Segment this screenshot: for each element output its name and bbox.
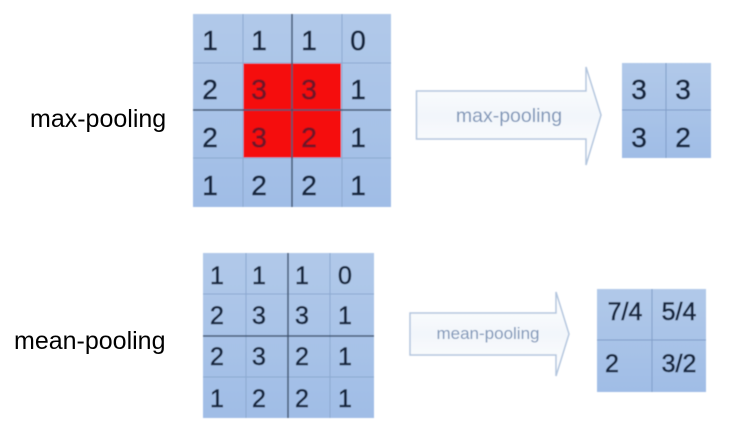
grid: max-pooling input: 2 — [202, 74, 218, 105]
grid: max-pooling input: 1 — [301, 25, 317, 56]
grid: max-pooling input: 1 — [251, 25, 267, 56]
grid: max-pooling input: 2 — [301, 122, 317, 153]
grid: mean-pooling input: 3 — [295, 302, 309, 330]
grid: max-pooling input — [193, 14, 391, 207]
grid: max-pooling input: 3 — [301, 74, 317, 105]
grid: mean-pooling input: 1 — [338, 343, 352, 371]
grid: max-pooling output: 3 — [631, 122, 647, 153]
grid: max-pooling input: 1 — [202, 170, 218, 201]
grid: mean-pooling input: 2 — [295, 343, 309, 371]
arrow: mean-pooling — [410, 292, 569, 376]
grid: max-pooling input: 0 — [350, 25, 366, 56]
label: max-pooling: max-pooling — [30, 105, 166, 133]
grid: mean-pooling input: 1 — [210, 385, 224, 413]
grid: mean-pooling input: 1 — [210, 262, 224, 290]
grid: mean-pooling input: 1 — [252, 262, 266, 290]
grid: max-pooling input: 2 — [251, 170, 267, 201]
grid: mean-pooling input — [203, 253, 374, 418]
grid: mean-pooling input: 1 — [338, 385, 352, 413]
grid: mean-pooling output: 2 — [605, 350, 619, 378]
highlighted red region — [243, 63, 341, 158]
grid: max-pooling input: 3 — [251, 74, 267, 105]
grid: max-pooling output — [622, 63, 711, 158]
grid: max-pooling input: 2 — [301, 170, 317, 201]
grid: max-pooling output: 2 — [675, 122, 691, 153]
arrow: max-pooling — [416, 67, 601, 165]
label: mean-pooling: mean-pooling — [14, 327, 166, 355]
grid: mean-pooling input: 0 — [338, 262, 352, 290]
grid: max-pooling output: 3 — [631, 74, 647, 105]
grid: max-pooling input: 1 — [350, 170, 366, 201]
grid: mean-pooling input: 2 — [295, 385, 309, 413]
grid: mean-pooling output — [597, 289, 706, 392]
grid: mean-pooling output: 7/4 — [608, 298, 642, 326]
grid: max-pooling input: 1 — [350, 74, 366, 105]
grid: mean-pooling input: 2 — [252, 385, 266, 413]
grid: mean-pooling input: 3 — [252, 343, 266, 371]
arrow: mean-pooling: mean-pooling — [436, 324, 540, 343]
grid: mean-pooling input: 3 — [252, 302, 266, 330]
grid: mean-pooling input: 1 — [295, 262, 309, 290]
grid: max-pooling input: 2 — [202, 122, 218, 153]
grid: mean-pooling input: 2 — [210, 343, 224, 371]
grid: max-pooling input: 1 — [202, 25, 218, 56]
grid: mean-pooling output: 3/2 — [662, 350, 696, 378]
grid: max-pooling input: 3 — [251, 122, 267, 153]
grid: max-pooling output: 3 — [675, 74, 691, 105]
grid: mean-pooling input: 1 — [338, 302, 352, 330]
arrow: max-pooling: max-pooling — [456, 105, 562, 127]
grid: mean-pooling input: 2 — [210, 302, 224, 330]
grid: mean-pooling output: 5/4 — [662, 298, 696, 326]
grid: max-pooling input: 1 — [350, 122, 366, 153]
